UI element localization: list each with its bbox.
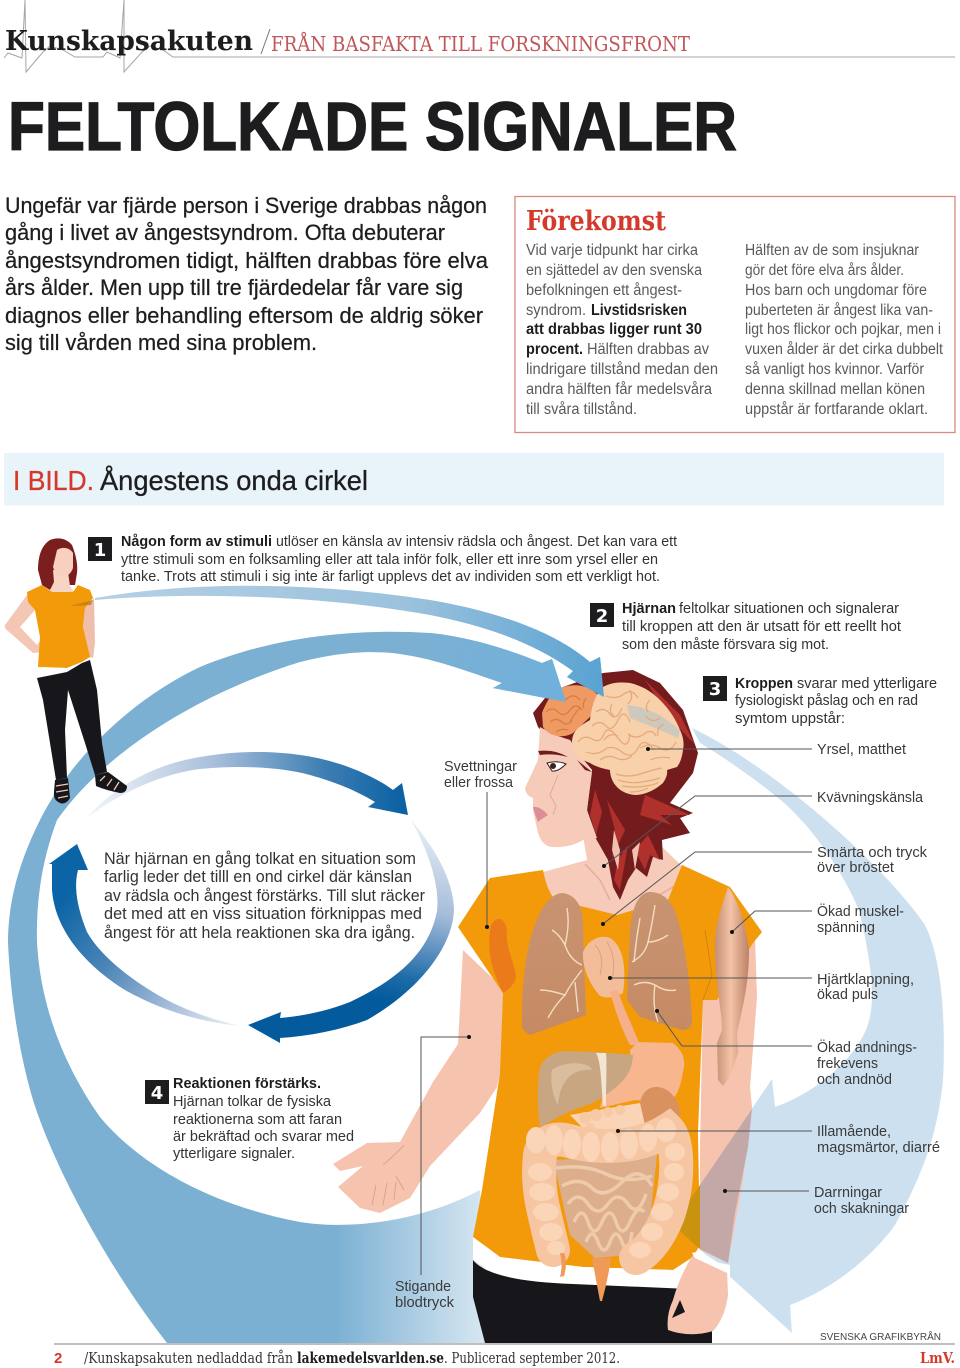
step 2: som den måste försvara sig mot. — [622, 637, 829, 653]
step 2 — [590, 601, 901, 653]
circle text — [104, 850, 425, 942]
text column left: syndrom. — [526, 302, 586, 319]
step 1: Någon form av stimuli — [121, 534, 272, 550]
callout: Darrningar: Darrningar — [814, 1185, 882, 1201]
callout: Svettningar eller frossa: eller frossa — [444, 775, 514, 791]
text column right: uppstår är fortfarande oklart. — [745, 401, 928, 418]
step 3: svarar med ytterligare — [797, 676, 937, 692]
hand and bangle — [668, 1255, 728, 1334]
white gap beside trousers — [693, 1258, 730, 1290]
badge 2 — [590, 603, 614, 627]
face — [525, 727, 597, 847]
organ: liver — [538, 1051, 633, 1127]
footer: 2 — [54, 1350, 62, 1367]
callout: Illamående — [616, 1124, 940, 1156]
intro text: års ålder. Men upp till tre fjärdedelar får vare sig — [5, 275, 463, 300]
step 4: Reaktionen förstärks. — [173, 1076, 321, 1092]
organ: spleen — [633, 1080, 687, 1140]
section heading band: I BILD: Ångestens onda cirkel — [100, 465, 368, 496]
eye — [547, 762, 566, 771]
callout: Ökad andningsfrekvens: frekevens — [817, 1056, 878, 1072]
callout: Ökad muskelspänning: spänning — [817, 920, 875, 936]
organ: oesophagus — [610, 990, 640, 1045]
badge 1: 1 — [94, 540, 106, 561]
step 4 — [145, 1076, 354, 1162]
body: shirt — [458, 865, 762, 1270]
callout: Hjärtklappning — [608, 972, 914, 1003]
intro text: gång i livet av ångestsyndrom. Ofta debuterar — [5, 220, 445, 245]
step 4: reaktionerna som att faran — [173, 1112, 342, 1128]
footer: /Kunskapsakuten nedladdad från — [84, 1350, 293, 1367]
text column left: befolkningen ett ångest- — [526, 282, 682, 299]
text column left: att drabbas ligger runt 30 — [526, 321, 702, 338]
circle text: När hjärnan en gång tolkat en situation som — [104, 850, 416, 868]
arrow: thin blue stimulus arrow — [95, 586, 604, 697]
callout: Darrningar: och skakningar — [814, 1201, 909, 1217]
callout: Smärta och tryck — [601, 845, 928, 926]
callout: Ökad andningsfrekvens — [655, 1009, 917, 1088]
body: neck and chest — [543, 836, 682, 918]
woman: left arm — [5, 595, 55, 653]
trousers — [473, 1260, 712, 1343]
hair streaks — [590, 680, 695, 890]
header: Kunskapsakuten: FRÅN BASFAKTA TILL FORSKNINGSFRONT — [271, 31, 690, 56]
callout: Smärta och tryck: över bröstet — [817, 860, 894, 876]
footer — [54, 1344, 955, 1368]
woman: face — [53, 548, 73, 577]
body: viewer-right arm — [700, 938, 757, 1263]
large woman figure — [333, 670, 762, 1343]
callout: Illamående: Illamående, — [817, 1124, 891, 1140]
callout: Hjärtklappning: Hjärtklappning, — [817, 972, 914, 988]
callout: Ökad andningsfrekvens: Ökad andnings- — [817, 1038, 917, 1056]
circular arrow: top segment — [85, 752, 408, 820]
woman: neck — [50, 570, 74, 594]
woman: right arm — [83, 598, 95, 658]
organ: muscle arm — [715, 887, 749, 1086]
step 1: utlöser en känsla av intensiv rädsla och ångest. Det kan vara ett — [276, 534, 677, 550]
text column right: Hälften av de som insjuknar — [745, 242, 919, 259]
organ: pancreas — [570, 1103, 645, 1135]
badge 4: 4 — [151, 1083, 163, 1104]
step 4: ytterligare signaler. — [173, 1146, 295, 1162]
step 1 — [88, 534, 677, 585]
step 3: fysiologiskt påslag och en rad — [735, 693, 918, 709]
callout: Ökad muskelspänning: Ökad muskel- — [817, 902, 904, 920]
arrow: pale blue return arrow on right — [673, 728, 944, 1333]
circle text: ångest för att hela reaktionen ska dra igång. — [104, 924, 415, 942]
step 3: Kroppen — [735, 676, 793, 692]
organ: small intestine — [553, 1155, 657, 1258]
text column right: vuxen ålder är det cirka dubbelt — [745, 341, 944, 358]
text column right — [745, 242, 944, 418]
woman: left sandal — [54, 778, 70, 803]
callout: Hjärtklappning: ökad puls — [817, 987, 878, 1003]
step 3 — [703, 676, 937, 727]
eyebrow — [538, 751, 568, 757]
organ: brain — [572, 682, 684, 795]
intro text — [5, 193, 488, 355]
callout: Stigande blodtryck: Stigande — [395, 1279, 451, 1295]
intro text: diagnos eller behandling eftersom de aldrig söker — [5, 303, 483, 328]
badge 1 — [88, 537, 112, 561]
step 4: är bekräftad och svarar med — [173, 1129, 354, 1145]
step 1: tanke. Trots att stimuli i sig inte är farligt upplevs det av individen som ett verkligt hot. — [121, 569, 660, 585]
footer: LmV. — [920, 1350, 955, 1367]
small woman figure — [5, 538, 127, 803]
badge 3: 3 — [709, 679, 721, 700]
badge 3 — [703, 676, 727, 701]
woman: right sandal — [95, 772, 127, 793]
step 1: yttre stimuli som en folksamling eller att tala inför folk, eller ett inre som yrsel eller en — [121, 552, 658, 568]
text column left: Vid varje tidpunkt har cirka — [526, 242, 698, 259]
woman: trousers — [37, 660, 107, 780]
step 2: feltolkar situationen och signalerar — [679, 601, 899, 617]
callout: Ökad andningsfrekvens: och andnöd — [817, 1072, 892, 1088]
hair strand by eye — [577, 760, 592, 772]
text column left: procent. — [526, 341, 583, 358]
step 4: Hjärnan tolkar de fysiska — [173, 1094, 332, 1110]
step 2: Hjärnan — [622, 601, 676, 617]
header: Kunskapsakuten: Kunskapsakuten — [5, 25, 253, 57]
circular arrow: right segment — [248, 820, 454, 1043]
callout: Svettningar eller frossa — [444, 759, 517, 929]
text column left — [526, 242, 718, 418]
circle text: farlig leder det tilll en ond cirkel där känslan — [104, 868, 412, 886]
intro text: ångestsyndromen tidigt, hälften drabbas före elva — [5, 248, 488, 273]
text column left: andra hälften får medelsvåra — [526, 381, 712, 398]
footer: lakemedelsvarlden.se — [297, 1350, 444, 1367]
step 3: symtom uppstår: — [735, 711, 845, 727]
callout: Kvävningskänsla — [602, 790, 924, 868]
callout: Illamående: magsmärtor, diarré — [817, 1140, 940, 1156]
circle text: av rädsla och ångest förstärks. Till slut räcker — [104, 887, 425, 905]
body: viewer-left arm — [333, 950, 505, 1213]
heading: Förekomst: Förekomst — [526, 206, 666, 237]
arrow: large blue sweep from body to brain — [8, 632, 566, 1344]
organ: colon — [526, 1118, 685, 1258]
hair back — [533, 670, 698, 900]
callout: Darrningar — [723, 1185, 909, 1217]
organ: amygdala lobe — [542, 685, 600, 736]
text column right: puberteten är ångest lika van- — [745, 302, 933, 319]
title: FELTOLKADE SIGNALER — [8, 88, 737, 165]
callout: Kvävningskänsla: Kvävningskänsla — [817, 790, 924, 806]
credit: SVENSKA GRAFIKBYRÅN — [820, 1330, 941, 1343]
callout: Ökad muskelspänning — [730, 902, 904, 936]
organ: lungs — [522, 892, 692, 1035]
text column right: gör det före elva års ålder. — [745, 262, 904, 279]
sweat patch — [489, 919, 516, 993]
section heading band: I BILD — [4, 453, 944, 506]
text column left: Hälften drabbas av — [587, 341, 709, 358]
panel: Förekomst — [515, 196, 955, 432]
callout: Svettningar eller frossa: Svettningar — [444, 759, 517, 775]
circle text: det med att en viss situation förknippas med — [104, 905, 422, 923]
badge 2: 2 — [596, 606, 608, 627]
text column left: en sjättedel av den svenska — [526, 262, 702, 279]
text column right: ligt hos flickor och pojkar, men i — [745, 321, 941, 338]
badge 4 — [145, 1080, 169, 1104]
callout: Yrsel, matthet: Yrsel, matthet — [817, 742, 906, 758]
text column left: lindrigare tillstånd medan den — [526, 361, 718, 378]
callout: Yrsel, matthet — [646, 742, 906, 758]
text column right: Hos barn och ungdomar före — [745, 282, 927, 299]
woman: white undershirt — [37, 657, 90, 675]
arrow heads over the brain — [430, 633, 604, 702]
arrow overlay on arm and shirt — [673, 1109, 752, 1263]
organ: stomach — [600, 1042, 684, 1108]
woman: hair — [38, 538, 77, 590]
step 2: till kroppen att den är utsatt för ett reellt hot — [622, 619, 901, 635]
header: Kunskapsakuten — [4, 0, 955, 72]
intro text: Ungefär var fjärde person i Sverige drabbas någon — [5, 193, 487, 218]
text column right: så vanligt hos kvinnor. Varför — [745, 361, 924, 378]
intro text: sig till vården med sina problem. — [5, 330, 317, 355]
lips — [533, 807, 548, 822]
organ: heart — [583, 937, 624, 997]
callout: Stigande blodtryck: blodtryck — [395, 1295, 455, 1311]
white undershirt — [473, 1237, 693, 1290]
circular arrow: left segment — [49, 844, 240, 1026]
callout: Stigande blodtryck — [395, 1035, 471, 1311]
text column left: till svåra tillstånd. — [526, 401, 637, 418]
footer: . Publicerad september 2012. — [444, 1351, 620, 1367]
text column left: Livstidsrisken — [591, 302, 687, 319]
text column right: denna skillnad mellan könen — [745, 381, 925, 398]
callout: Smärta och tryck: Smärta och tryck — [817, 845, 928, 861]
organ: appendix and rectum — [560, 1253, 611, 1301]
woman: shirt — [27, 585, 93, 668]
section heading band: I BILD: I BILD. — [13, 465, 94, 496]
